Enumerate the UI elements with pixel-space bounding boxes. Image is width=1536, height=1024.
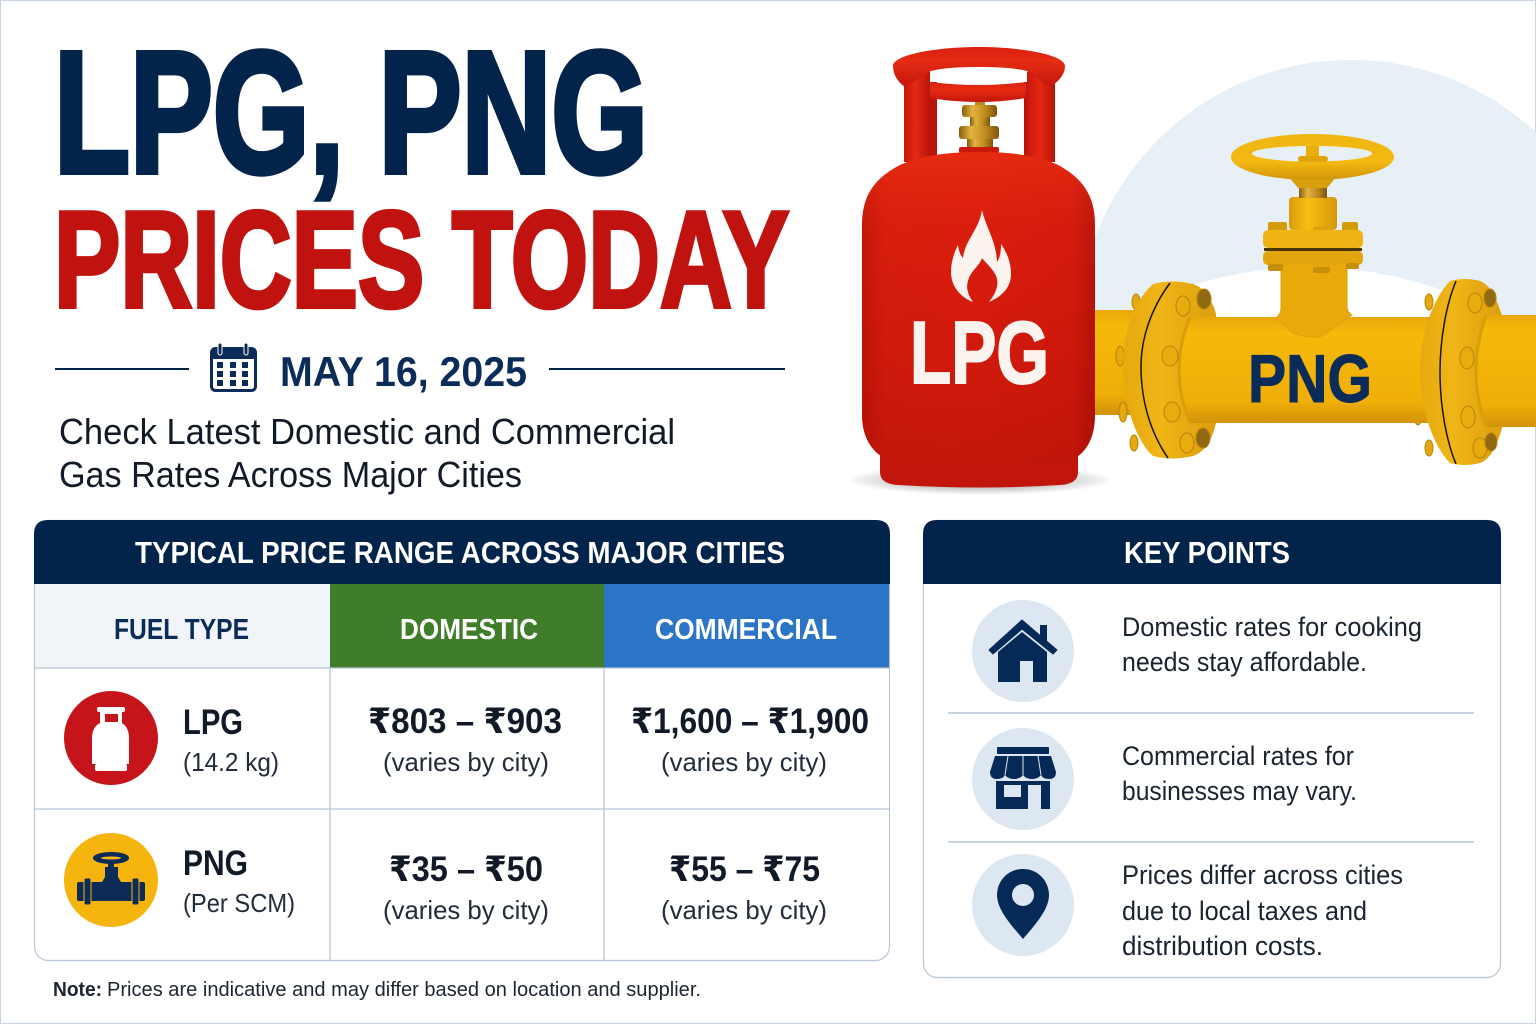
row: LPG: (varies by city) [383, 747, 549, 777]
subtitle [59, 411, 675, 495]
icon: location pin [972, 854, 1074, 956]
cylinder body [862, 152, 1095, 465]
PNG domestic price: ₹35 – ₹50 [389, 850, 543, 889]
point: domestic rates [972, 600, 1422, 702]
point: domestic rates: needs stay affordable. [1122, 647, 1367, 677]
icon: LPG cylinder [64, 691, 158, 785]
pipe left segment [1090, 310, 1140, 415]
left flange [1123, 282, 1216, 458]
cylinder foot ring [880, 450, 1078, 488]
icon: shop [972, 728, 1074, 830]
row: PNG: (Per SCM) [183, 888, 295, 918]
note: Prices are indicative and may differ based on location and supplier. [107, 979, 701, 1001]
valve neck [1276, 262, 1352, 337]
LPG commercial price: ₹1,600 – ₹1,900 [631, 702, 869, 741]
icon: PNG pipe [64, 833, 158, 927]
row: LPG: (14.2 kg) [183, 747, 279, 777]
point: domestic rates: Domestic rates for cooking [1122, 612, 1422, 642]
point: commercial rates: businesses may vary. [1122, 776, 1357, 806]
PNG commercial price: ₹55 – ₹75 [669, 850, 820, 889]
subtitle: Check Latest Domestic and Commercial [59, 411, 675, 452]
LPG cylinder label: LPG [910, 303, 1049, 402]
icon: house [972, 600, 1074, 702]
column header: fuel type: FUEL TYPE [114, 614, 249, 646]
hero: background circle [1078, 60, 1536, 320]
LPG name: LPG [183, 703, 243, 742]
column header: commercial: COMMERCIAL [655, 614, 837, 646]
point: city differences: due to local taxes and [1122, 896, 1367, 926]
LPG domestic price: ₹803 – ₹903 [368, 702, 562, 741]
point: commercial rates [972, 728, 1357, 830]
row: PNG: (varies by city) [661, 895, 827, 925]
table header bar [34, 520, 890, 584]
valve flange [1263, 197, 1363, 273]
cylinder valve [959, 102, 999, 153]
handwheel [1231, 134, 1394, 198]
ground shadow [845, 465, 1115, 495]
row: LPG: (varies by city) [661, 747, 827, 777]
PNG name: PNG [183, 844, 248, 883]
right flange [1420, 279, 1502, 465]
hero: PNG pipeline [1090, 134, 1536, 465]
column header: domestic: DOMESTIC [400, 614, 538, 646]
title line 1: LPG, PNG: LPG, PNG [54, 15, 648, 209]
cylinder handle [893, 47, 1065, 162]
date text: MAY 16, 2025 [280, 348, 527, 395]
panel: price table [34, 520, 890, 960]
table frame [34, 520, 890, 960]
row: PNG [64, 833, 827, 927]
flange bolts [1162, 289, 1497, 458]
point: city differences: distribution costs. [1122, 931, 1323, 961]
title [54, 15, 789, 337]
pipe body collar and right segment [1179, 315, 1536, 427]
note: Note: [53, 979, 102, 1001]
row: PNG: (varies by city) [383, 895, 549, 925]
row: LPG [64, 691, 869, 785]
date row [55, 343, 785, 395]
PNG pipe label: PNG [1248, 341, 1372, 417]
hero: LPG cylinder [845, 47, 1115, 495]
column header: fuel type [35, 584, 330, 668]
column header: domestic [330, 584, 604, 668]
title line 2: PRICES TODAY: PRICES TODAY [54, 184, 789, 337]
pipe body [1180, 317, 1430, 423]
key points header bar [923, 520, 1501, 584]
point: commercial rates: Commercial rates for [1122, 741, 1354, 771]
column header: commercial [604, 584, 889, 668]
table heading: TYPICAL PRICE RANGE ACROSS MAJOR CITIES [135, 535, 785, 570]
icon: calendar [211, 343, 256, 390]
key points heading: KEY POINTS [1124, 535, 1290, 570]
rear flange bolts [1116, 294, 1433, 456]
point: city differences [972, 854, 1403, 961]
panel: key points [923, 520, 1501, 978]
icon: flame [951, 210, 1011, 302]
subtitle: Gas Rates Across Major Cities [59, 454, 522, 495]
key points frame [924, 520, 1500, 978]
point: city differences: Prices differ across cities [1122, 860, 1403, 890]
